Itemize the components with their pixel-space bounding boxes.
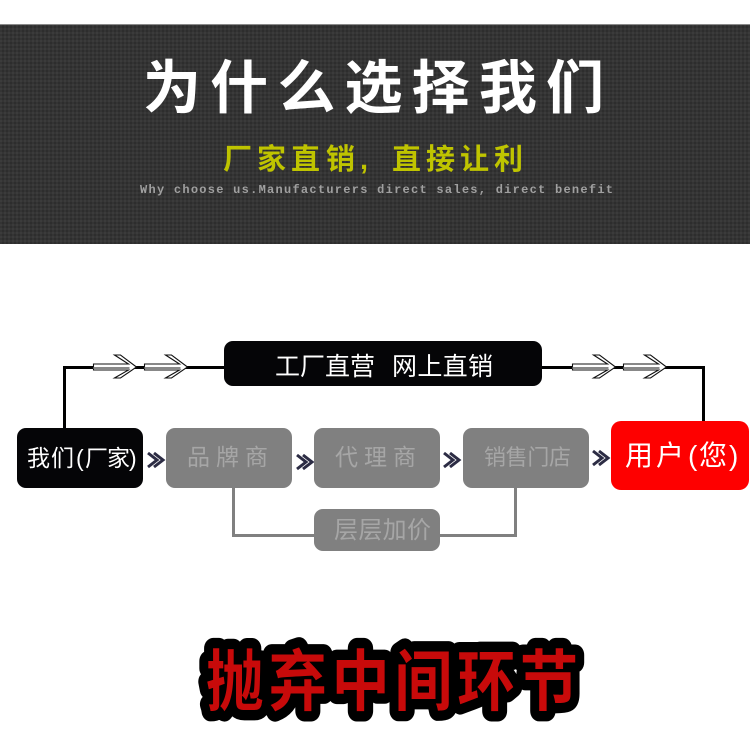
chevron 3 [444,453,459,467]
box: brand dealer: 品牌商 [187,444,268,470]
box: factory direct online direct: 工厂直营 [275,353,375,381]
box: factory direct online direct [224,341,542,386]
box: layered markup [314,509,440,551]
arrow pair right [572,355,666,378]
header banner [0,24,750,244]
box: user [611,421,749,490]
box: user: 用户(您) [625,440,738,471]
box: factory direct online direct: 网上直销 [392,353,493,381]
box: brand dealer [166,428,292,488]
chevron 2 [297,455,312,469]
subtitle: 厂家直销,直接让利 [223,143,523,176]
box: us the factory: 我们(厂家) [27,445,137,471]
chevron 4 [593,451,608,465]
box: retail store: 销售门店 [484,445,571,470]
grey markup route connector [234,488,516,536]
direct route connector left [64,355,224,428]
direct route connector right [542,355,704,421]
box: agent [314,428,440,488]
box: agent: 代理商 [335,444,416,470]
box: layered markup: 层层加价 [334,517,431,544]
english tagline: Why choose us.Manufacturers direct sales, direct benefit [140,183,613,197]
arrow pair left [94,355,188,378]
box: retail store [463,428,589,488]
slogan: cut out the middlemen: 抛弃中间环节 [206,645,578,720]
chevron 1 [148,453,163,467]
title: 为什么选择我们 [143,56,604,121]
box: us the factory [17,428,143,488]
